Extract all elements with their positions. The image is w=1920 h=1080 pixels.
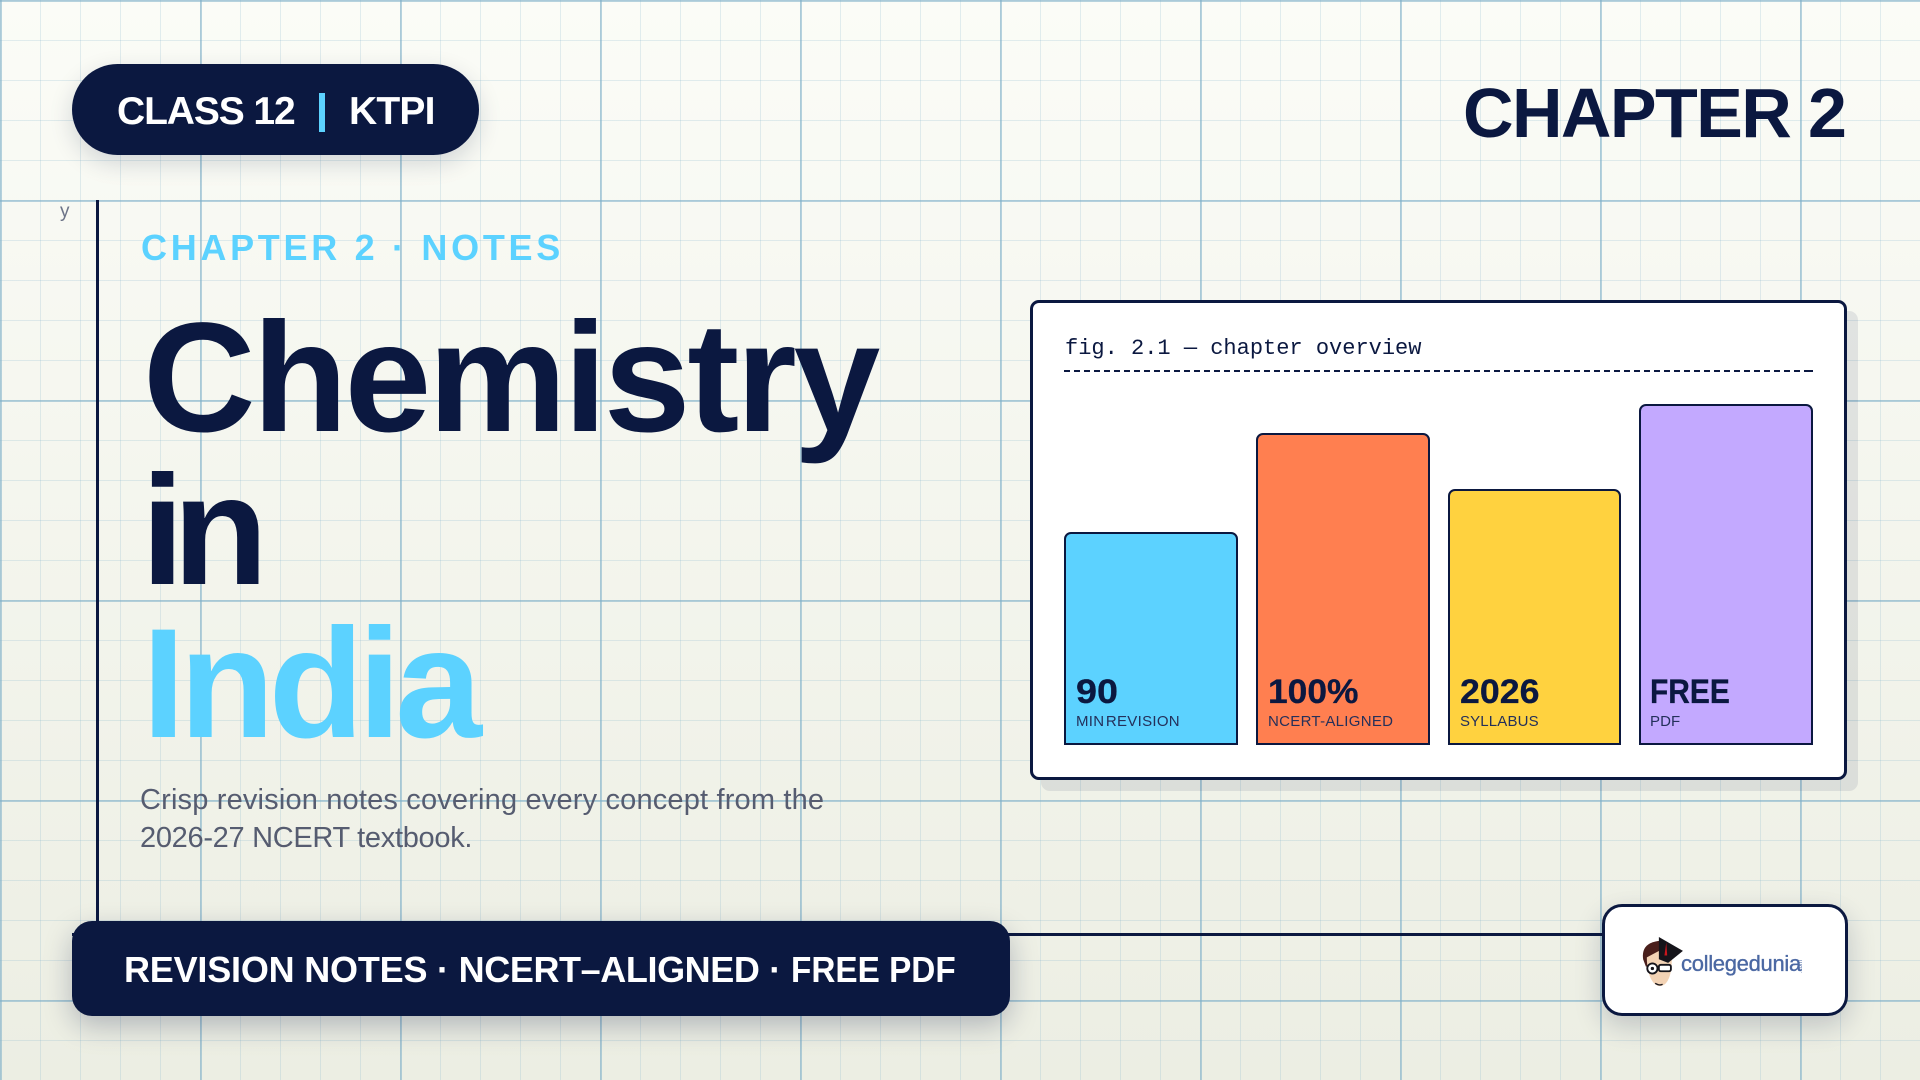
- pill separator: [319, 93, 325, 132]
- figure caption: fig. 2.1 — chapter overview: [1065, 336, 1421, 361]
- bar: free PDF: [1639, 404, 1813, 745]
- label: SYLLABUS: [1460, 713, 1539, 730]
- title line: in: in: [141, 444, 257, 618]
- axis label: y: y: [60, 201, 70, 222]
- chapter label top right: CHAPTER 2: [1463, 74, 1845, 152]
- label: PDF: [1650, 713, 1680, 730]
- title line: India: India: [142, 597, 476, 771]
- banner text: REVISION NOTES · NCERT–ALIGNED ·: [124, 949, 781, 990]
- bottom banner: [72, 921, 1010, 1016]
- y axis line: [96, 200, 99, 934]
- value: FREE: [1650, 673, 1730, 711]
- bar: 2026 syllabus: [1448, 489, 1621, 745]
- bar chart: [1064, 404, 1813, 745]
- subtitle: [140, 784, 824, 854]
- caption dashed divider: [1064, 370, 1813, 372]
- value: 100%: [1268, 673, 1358, 711]
- logo wordmark: collegedunia: [1681, 951, 1801, 976]
- bar: 90 min revision: [1064, 532, 1238, 745]
- logo card: [1602, 904, 1848, 1016]
- pill text: subject code: KTPI: [349, 90, 435, 133]
- main title: [141, 291, 880, 771]
- class pill: [72, 64, 479, 155]
- figure card: [1030, 300, 1847, 780]
- label: MIN REVISION: [1076, 713, 1180, 730]
- subtitle: 2026-27 NCERT textbook.: [140, 822, 472, 854]
- logo suffix: .com: [1798, 960, 1804, 973]
- subtitle: Crisp revision notes covering every concept from the: [140, 784, 824, 816]
- x axis line: [72, 933, 1612, 936]
- value: 2026: [1460, 673, 1539, 711]
- icon: student head with graduation cap: [1642, 937, 1683, 986]
- bar: 100% NCERT-aligned: [1256, 433, 1430, 745]
- value: 90: [1076, 673, 1118, 711]
- eyebrow: chapter notes: CHAPTER 2 · NOTES: [141, 227, 564, 268]
- pill text: class: CLASS 12: [117, 90, 295, 133]
- title line: Chemistry: Chemistry: [143, 291, 877, 465]
- label: NCERT-ALIGNED: [1268, 713, 1393, 730]
- banner text: FREE PDF: [791, 949, 956, 990]
